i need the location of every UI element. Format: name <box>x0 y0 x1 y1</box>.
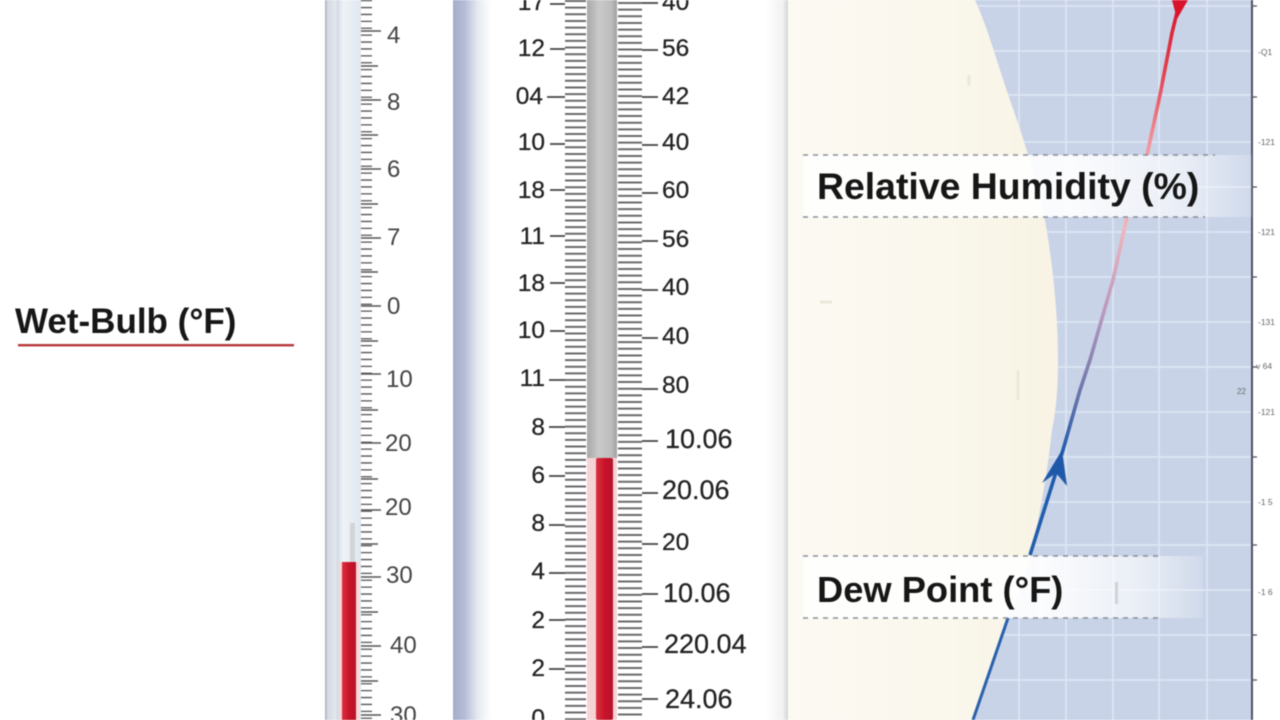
scale labels: 40 <box>390 632 417 659</box>
left scale labels: 18 <box>518 270 545 297</box>
left scale labels: 12 <box>518 35 545 62</box>
left scale labels: 10 <box>518 317 545 344</box>
left scale labels: 2 <box>531 607 545 634</box>
axis labels: 22 <box>1237 387 1246 396</box>
left scale labels: 8 <box>531 510 545 537</box>
left scale labels: 18 <box>518 177 545 204</box>
axis labels: -131 <box>1258 317 1275 327</box>
right scale labels: 42 <box>662 83 689 110</box>
left scale labels: 4 <box>531 558 545 585</box>
right scale labels: 40 <box>662 129 689 156</box>
scale labels: 4 <box>387 22 400 49</box>
right scale labels: 20.06 <box>662 475 730 505</box>
panel body shading <box>453 0 788 720</box>
gradient line: lower section <box>973 618 1008 720</box>
thermometer tube <box>587 0 617 720</box>
right scale labels <box>662 0 747 714</box>
label: wet-bulb: Wet-Bulb (°F) <box>15 302 236 341</box>
gradient line: upper section <box>1147 0 1180 155</box>
gradient line: middle section <box>1030 217 1127 555</box>
trend line with arrows <box>973 0 1188 720</box>
grid lines <box>970 0 1252 720</box>
panel: left thermometer wet-bulb scale <box>325 0 417 720</box>
scale labels: 0 <box>387 293 400 320</box>
axis labels: -121 <box>1258 137 1275 147</box>
scale labels: 8 <box>387 89 400 116</box>
axis labels: -121 <box>1258 407 1275 417</box>
left scale labels: 2 <box>531 655 545 682</box>
right scale labels: 24.06 <box>665 684 733 714</box>
right scale labels: 10.06 <box>663 578 731 608</box>
right scale labels: 56 <box>662 226 689 253</box>
callout: relative humidity <box>803 155 1252 217</box>
axis labels: v 64 <box>1256 361 1272 371</box>
red mercury column <box>587 458 617 720</box>
axis labels <box>1237 47 1275 597</box>
icon: red arrowhead <box>1172 0 1188 19</box>
right scale labels: 10.06 <box>665 424 733 454</box>
thermometer tube <box>325 0 361 720</box>
right scale labels: 56 <box>662 35 689 62</box>
callout: dew point: Dew Point (°F) <box>817 569 1063 610</box>
axis labels: -Q1 <box>1258 47 1272 57</box>
faint cream marks <box>820 75 1018 400</box>
scale labels: 10 <box>386 366 413 393</box>
left scale labels: 6 <box>531 462 545 489</box>
right scale labels: 80 <box>662 372 689 399</box>
axis labels: -1 5 <box>1258 497 1273 507</box>
scale labels <box>385 22 417 720</box>
right scale labels: 40 <box>662 274 689 301</box>
blue chart area <box>788 0 1252 720</box>
panel: right chart background <box>788 0 1275 720</box>
left scale labels: 8 <box>531 414 545 441</box>
tick hatching <box>576 0 630 720</box>
left scale labels: 11 <box>520 223 545 250</box>
scale labels: 20 <box>385 430 412 457</box>
callout: relative humidity: Relative Humidity (%) <box>817 165 1199 207</box>
cream circle <box>788 0 1058 720</box>
red mercury column <box>339 523 359 720</box>
left scale labels: 10 <box>518 129 545 156</box>
scale labels: 6 <box>387 156 400 183</box>
major ticks <box>547 3 658 699</box>
callout: dew point <box>803 556 1203 618</box>
left scale labels: 11 <box>520 365 545 392</box>
scale labels: 7 <box>387 224 400 251</box>
panel: center thermometer <box>453 0 788 720</box>
icon: blue arrowhead <box>1042 450 1067 486</box>
right scale labels: 60 <box>662 177 689 204</box>
right scale labels: 220.04 <box>664 629 747 659</box>
left scale labels <box>516 0 545 720</box>
axis labels: -121 <box>1258 227 1275 237</box>
right scale labels: 20 <box>662 529 689 556</box>
right scale labels: 40 <box>662 323 689 350</box>
tick marks <box>361 0 381 720</box>
left scale labels: 04 <box>516 83 543 110</box>
scale labels: 20 <box>385 494 412 521</box>
axis labels: -1 6 <box>1258 587 1273 597</box>
scale labels: 30 <box>386 562 413 589</box>
right axis <box>1251 0 1257 720</box>
